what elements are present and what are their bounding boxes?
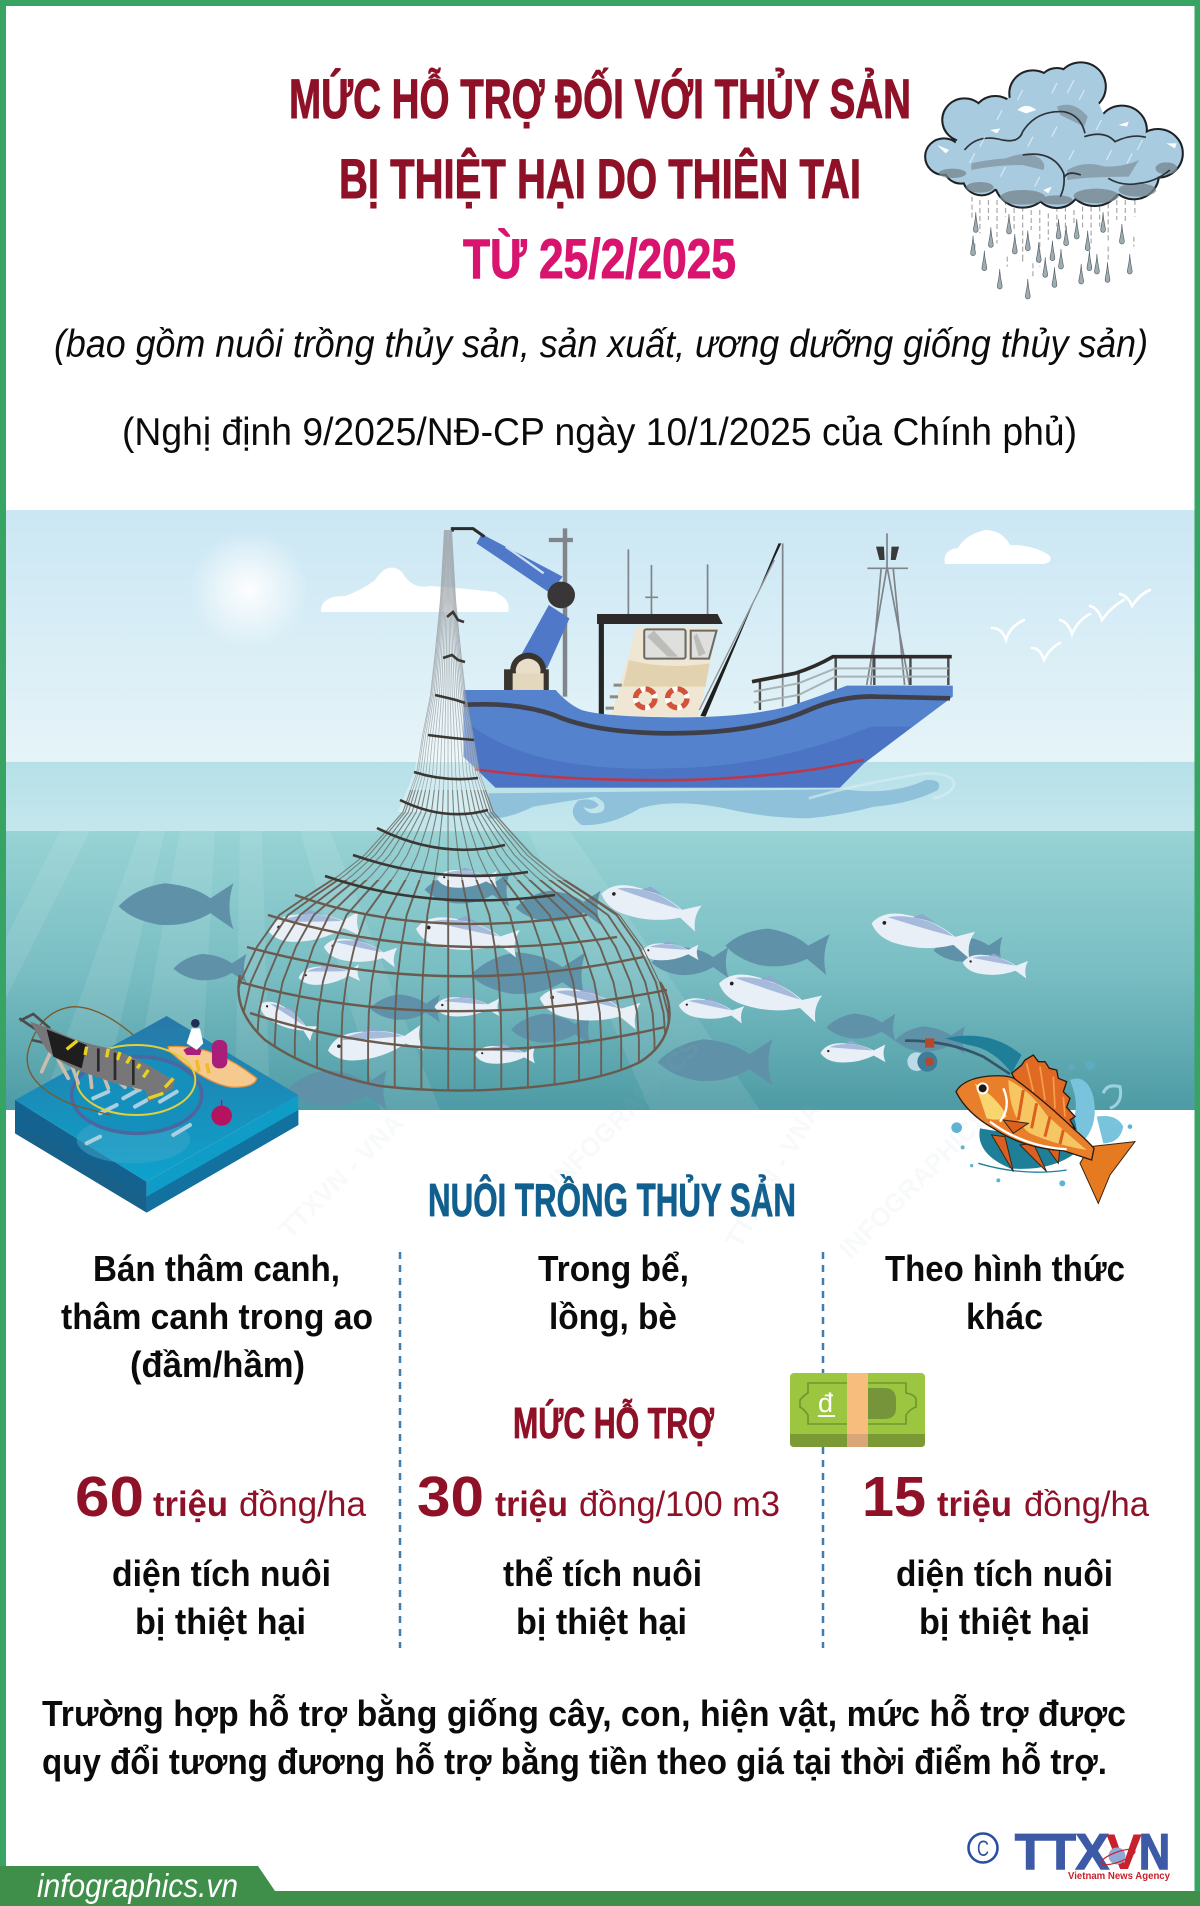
logo: copyright xyxy=(968,1834,998,1862)
clouds and sky details xyxy=(321,530,1051,612)
illustration: sea background xyxy=(0,510,1200,1110)
column 3 label: khác xyxy=(966,1296,1043,1337)
basis: column 3 xyxy=(896,1553,1113,1642)
hull xyxy=(463,686,953,788)
basis: column 2: bị thiệt hại xyxy=(516,1601,687,1642)
column 1 label xyxy=(61,1248,373,1385)
value: column 3: 15 xyxy=(862,1465,926,1529)
column 1 label: thâm canh trong ao xyxy=(61,1296,373,1337)
value: column 1: triệu xyxy=(153,1485,228,1524)
rail xyxy=(752,657,952,710)
title xyxy=(289,67,911,290)
column 3 label: Theo hình thức xyxy=(885,1248,1125,1289)
watermarks: INFOGRAPHICS xyxy=(543,1032,705,1194)
closing note xyxy=(42,1692,1126,1782)
support level heading: MỨC HỖ TRỢ xyxy=(513,1397,714,1448)
footer band xyxy=(0,1866,1200,1906)
column 2 label: Trong bể, xyxy=(538,1248,689,1289)
shrimp xyxy=(42,1053,140,1090)
shrimp farmer boat xyxy=(168,1046,257,1087)
watermarks xyxy=(273,1032,995,1264)
buoy xyxy=(220,1100,224,1110)
title: BỊ THIỆT HẠI DO THIÊN TAI xyxy=(339,147,861,210)
section heading: NUÔI TRỒNG THỦY SẢN xyxy=(428,1174,796,1226)
column 3 label xyxy=(885,1248,1125,1337)
crane xyxy=(476,534,563,593)
silver fish xyxy=(255,868,1029,1064)
value: column 2: 30 xyxy=(417,1465,484,1529)
life rings xyxy=(636,689,687,708)
logo: TTXVN: N xyxy=(1139,1824,1170,1880)
wake xyxy=(489,780,939,825)
basis: column 2: thể tích nuôi xyxy=(503,1553,702,1594)
logo: TTXVN xyxy=(1015,1824,1170,1882)
basis: column 1 xyxy=(112,1553,331,1642)
basis: column 2 xyxy=(503,1553,702,1642)
value: column 2: đồng/100 m3 xyxy=(579,1485,780,1524)
icon: rain cloud xyxy=(925,63,1182,299)
icon: money xyxy=(790,1373,925,1447)
watermarks: INFOGRAPHICS xyxy=(833,1102,995,1264)
watermarks: TTXVN - VNA xyxy=(719,1096,827,1253)
value: column 2 xyxy=(417,1465,780,1529)
fishing boat xyxy=(452,528,954,825)
legal source: (Nghị định 9/2025/NĐ-CP ngày 10/1/2025 của Chính phủ) xyxy=(122,411,1077,454)
rings xyxy=(77,1045,195,1115)
value: column 3: đồng/ha xyxy=(1024,1485,1150,1524)
boom xyxy=(700,543,781,717)
icon: fish with rod xyxy=(905,1036,1135,1203)
source site: infographics.vn xyxy=(37,1867,238,1904)
icon: shrimp farm platform xyxy=(15,1007,298,1213)
title: TỪ 25/2/2025 xyxy=(463,227,736,290)
masts xyxy=(549,528,909,707)
icon: money: đ xyxy=(818,1388,833,1418)
column 1 label: Bán thâm canh, xyxy=(93,1248,340,1289)
value: column 1: 60 xyxy=(75,1465,144,1529)
value: column 2: triệu xyxy=(495,1485,568,1524)
dividers xyxy=(400,1252,823,1648)
value: column 1 xyxy=(75,1465,367,1529)
basis: column 3: bị thiệt hại xyxy=(919,1601,1090,1642)
column 2 label xyxy=(538,1248,689,1337)
value: column 3 xyxy=(862,1465,1150,1529)
basis: column 1: diện tích nuôi xyxy=(112,1553,331,1594)
logo: TTXVN: TTX xyxy=(1015,1824,1109,1880)
title: MỨC HỖ TRỢ ĐỐI VỚI THỦY SẢN xyxy=(289,67,911,130)
value: column 1: đồng/ha xyxy=(239,1485,367,1524)
basis: column 1: bị thiệt hại xyxy=(135,1601,306,1642)
basis: column 3: diện tích nuôi xyxy=(896,1553,1113,1594)
logo: TTXVN: Vietnam News Agency xyxy=(1068,1871,1170,1882)
cabin xyxy=(611,627,718,717)
closing note: quy đổi tương đương hỗ trợ bằng tiền theo giá tại thời điểm hỗ trợ. xyxy=(42,1740,1107,1782)
column 1 label: (đầm/hầm) xyxy=(130,1344,305,1385)
logo: copyright: C xyxy=(977,1836,989,1861)
fish shadows xyxy=(118,873,1002,1110)
watermarks: TTXVN - VNA xyxy=(273,1107,410,1244)
birds xyxy=(992,590,1150,660)
value: column 3: triệu xyxy=(937,1485,1012,1524)
closing note: Trường hợp hỗ trợ bằng giống cây, con, hiện vật, mức hỗ trợ được xyxy=(42,1692,1126,1734)
logo: TTXVN: V xyxy=(1106,1824,1143,1880)
column 2 label: lồng, bè xyxy=(549,1296,677,1337)
fishing net xyxy=(230,530,670,1120)
